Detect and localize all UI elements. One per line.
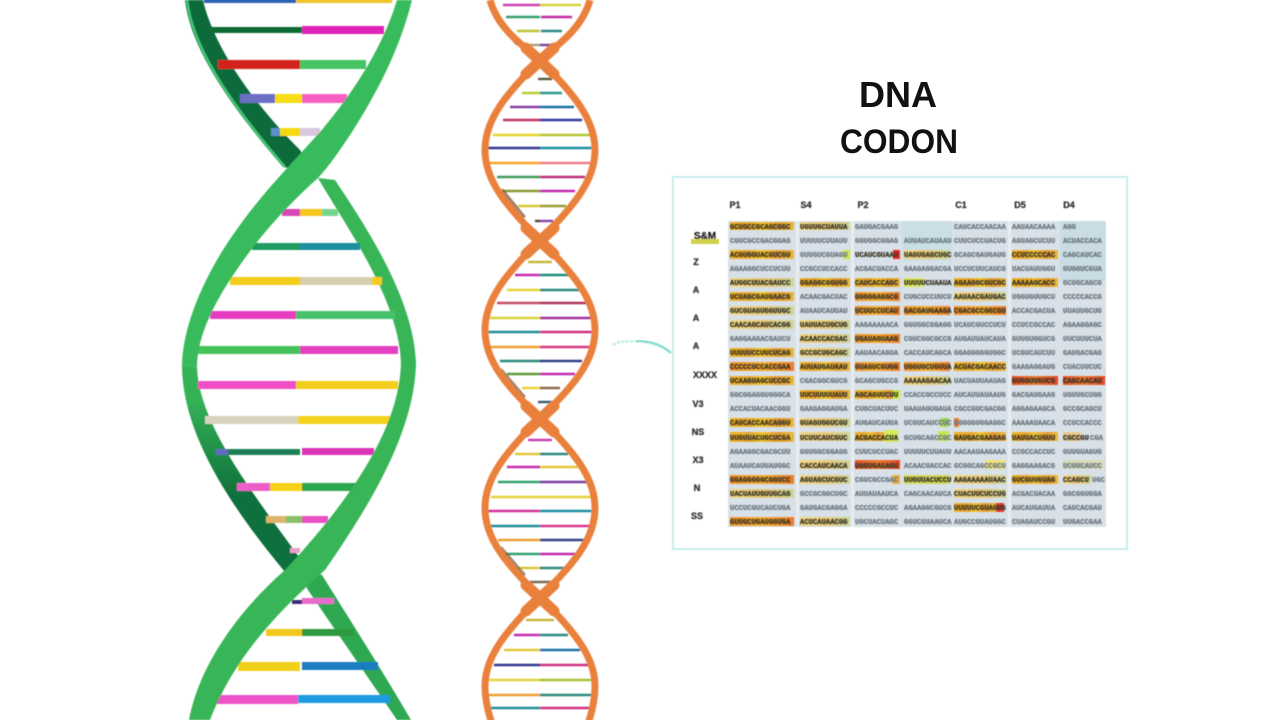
orange strands	[485, 0, 595, 720]
codon text: UUUUUCCUUCUCAG	[730, 350, 790, 358]
codon text: AUCAUUAUAAUG	[954, 392, 1006, 400]
codon text: UGGUGAUAGU	[855, 463, 898, 471]
codon text: GGGGGUGGAGGC	[954, 420, 1006, 428]
codon text: CAGCAACAU	[1063, 378, 1102, 386]
codon text: GUUGUCGUAGU	[800, 252, 847, 260]
codon text: CGUCGGCGCCG	[904, 336, 951, 344]
codon text: CGACGCCGGCGU	[954, 308, 1006, 316]
highlighted codon cells	[730, 222, 1105, 526]
codon text: CCGCCUCCACC	[800, 266, 848, 274]
codon text: UAUUACUGUU	[1012, 435, 1055, 443]
codon text: CUUCUCCUACUG	[954, 238, 1006, 246]
codon text: ACGUGGUACGUCGU	[730, 252, 790, 260]
codon text: AUAAUCAUUAUGGC	[730, 463, 791, 471]
column headers: D5	[1014, 200, 1026, 210]
rungs of the orange helix	[487, 5, 593, 708]
codon text: CACCAUCAACA	[800, 463, 848, 471]
codon text: AAUAACAGUA	[855, 350, 899, 358]
codon text: GUCGUUGUAG	[1012, 477, 1055, 485]
codon text: GCCGCGGCUGC	[800, 491, 848, 499]
column headers: P1	[729, 200, 741, 210]
codon text: UAUUACUGCUG	[800, 322, 847, 330]
title line one: DNA	[859, 74, 937, 115]
codon text: ACAACUACCAC	[904, 463, 952, 471]
codon text: GGAGGGGGUGGC	[954, 350, 1006, 358]
codon text: CGCCGU	[1063, 435, 1089, 443]
codon text: UUCUUUCUA	[1063, 336, 1103, 344]
column headers: D4	[1063, 200, 1075, 210]
row headers: A	[693, 341, 700, 351]
codon text: GUGGUUGUCG	[1012, 378, 1055, 386]
codon text: AGUAGCUCGUC	[800, 477, 848, 485]
codon text: UCGUCAUCCUC	[904, 420, 952, 428]
codon text: GGUGGCGGAG	[855, 238, 898, 246]
back strand lower	[182, 365, 312, 572]
codon text: AUGCCGUAUGGC	[954, 519, 1006, 527]
codon text: CGUCGCCGAC	[855, 477, 899, 485]
codon text: UGGUGCUGUUA	[904, 364, 952, 372]
codon text: CUUCUCCUAC	[855, 449, 899, 457]
codon text: ACGACUACAA	[1012, 491, 1056, 499]
codon text: CAGCAACAUCA	[904, 491, 952, 499]
codon text: CCUCCACCC	[1063, 420, 1103, 428]
codon text: AAAAAGCACC	[1012, 280, 1056, 288]
codon text: GAAGAGGAUGA	[800, 406, 848, 414]
codon text: ACCACUACAACGGU	[730, 406, 790, 414]
column headers: S4	[800, 200, 812, 210]
codon text: CCGCCACCUC	[1012, 449, 1056, 457]
codon text: UUGUUACUGCUCGA	[730, 435, 791, 443]
row headers: Z	[693, 257, 699, 267]
orange crossings	[526, 48, 554, 611]
codon text: GUGGUCGUA	[1063, 266, 1103, 274]
codon text: UUAUUGCUG	[1063, 308, 1102, 316]
orange DNA helix	[485, 0, 595, 720]
column headers: P2	[857, 200, 869, 210]
codon text: AGAAGGCGUCG	[904, 505, 951, 513]
codon text: UUUUUCUUAUU	[904, 449, 951, 457]
codon text: GUAGUCGUGG	[855, 364, 898, 372]
codon text: GGAGGGGGCGGUCC	[730, 477, 791, 485]
codon text: UUGACCGAA	[1063, 519, 1103, 527]
codon text: GCAGCUGCCG	[855, 378, 898, 386]
codon text: AAGAAAAACA	[855, 322, 899, 330]
codon text: AGAAGGCGACGCUU	[730, 449, 790, 457]
codon text: GGAGGCGGUGG	[800, 280, 847, 288]
codon text: AGAAGGCUCCUCUU	[730, 266, 790, 274]
panel frame	[673, 177, 1127, 549]
codon text: GAGGAAGACG	[1012, 463, 1055, 471]
codon text: CGUCGCCGACGGAG	[730, 238, 790, 246]
codon text: AGCAGUUCUU	[855, 392, 898, 400]
codon text: ACCACGACUA	[1012, 308, 1056, 316]
codon text: UUUUUCGUAGUG	[954, 505, 1006, 513]
codon text: CCCCCACCG	[1063, 294, 1102, 302]
codon text: GAUGACGAAGAG	[954, 435, 1006, 443]
codon text: ACGACUACCA	[855, 266, 899, 274]
codon text: UCAAGUAGCUCCGC	[730, 378, 791, 386]
codon text: GGUGGCGGAGG	[904, 322, 951, 330]
codon text: AUGAUUAUCAUA	[954, 336, 1006, 344]
codon text: CGACGGCGUCG	[800, 378, 847, 386]
row headers: N	[694, 483, 700, 493]
codon text: UGCUACUAGC	[855, 519, 899, 527]
front strand one	[182, 0, 412, 368]
orange strand shading	[498, 20, 524, 576]
codon text: ACGACCACUA	[855, 435, 899, 443]
codon text: CCCCCUCCACCGAA	[730, 364, 791, 372]
codon text: AUAAUCAUUAU	[800, 308, 847, 316]
codon text: AUUAUGAUAAU	[800, 364, 847, 372]
codon text: GUUGUAGUG	[1063, 449, 1102, 457]
codon text: CUACUUCUCCUG	[954, 491, 1006, 499]
codon text: UUCUUUUUAUU	[800, 392, 847, 400]
codon text: ACUACCACA	[1063, 238, 1103, 246]
codon text: UCUUCCUCAU	[855, 308, 898, 316]
codon text: AAAAAGAACAA	[904, 378, 952, 386]
codon text: AGUAGCUCUU	[1012, 238, 1055, 246]
codon text: CUACUUCUC	[1063, 364, 1103, 372]
column headers: C1	[955, 200, 967, 210]
codon text: UCAUCGUCCUCU	[954, 322, 1006, 330]
codon text: GAAGAGGAUG	[1012, 364, 1055, 372]
codon text: UACUAUUGUUGCAG	[730, 491, 790, 499]
codon text: CCAGCU	[1063, 477, 1089, 485]
title	[840, 74, 958, 161]
codon text: UUGUUACUCCU	[904, 477, 951, 485]
codon text: UGC	[1092, 477, 1106, 485]
row headers: NS	[692, 427, 704, 437]
codon text: UCCUCUUCAUCG	[954, 266, 1006, 274]
back strand upper highlight	[187, 0, 285, 167]
codon text	[730, 224, 1106, 527]
codon text: UUUUUCUAAUA	[904, 280, 952, 288]
table background	[728, 221, 1106, 527]
codon text: GCUGCAGCG	[1063, 280, 1102, 288]
codon text: GAUGACGAAG	[855, 224, 898, 232]
codon text: UUUUUCUUAUU	[800, 238, 847, 246]
codon text: GACGAUGAAG	[1012, 392, 1055, 400]
codon text: CCUCCCCCAC	[1012, 252, 1056, 260]
codon text: GCGGCAGCCGCU	[954, 463, 1006, 471]
codon text: ACAACGACUAC	[800, 294, 848, 302]
codon text: AUCAUGAUUA	[1012, 505, 1056, 513]
codon text: GGGGGAGGCG	[855, 294, 898, 302]
codon text: GUUGUGGUCG	[1012, 336, 1055, 344]
codon text: AGGAGAAGCA	[1012, 406, 1056, 414]
row headers: S&M	[694, 231, 716, 242]
codon text: AGG	[1063, 224, 1076, 232]
codon text: GCAGCGAUGAUG	[954, 252, 1006, 260]
codon text: GGUCGUAAUCA	[904, 519, 952, 527]
codon text: CCCCCGCCUC	[855, 505, 899, 513]
codon text: UACUAUUGGU	[1012, 266, 1055, 274]
codon text: GAGGAAGACGAUCU	[730, 336, 790, 344]
row headers: SS	[691, 511, 703, 521]
codon text: GUAGUGGUCGU	[800, 420, 847, 428]
codon text: UGAUAGUAAG	[855, 336, 898, 344]
codon text: ACUACGACAACC	[954, 364, 1006, 372]
codon text: GAAGAGGACGA	[904, 266, 952, 274]
codon text: CAUCACCAGC	[855, 280, 899, 288]
codon text: GACGAUGAAGA	[904, 308, 952, 316]
codon text: GAUGACGAG	[1063, 350, 1102, 358]
codon text: GGUGGCGGAGG	[800, 449, 847, 457]
title line two: CODON	[840, 123, 958, 161]
codon text: CCUCCGCCAC	[1012, 322, 1056, 330]
codon text: GUUGCUGAUGGUGA	[730, 519, 791, 527]
codon text: GUCGUAGUGGUUGC	[730, 308, 791, 316]
codon text: CUGCUACUUC	[855, 406, 899, 414]
row headers: X3	[692, 455, 704, 465]
codon text: CAGCAUCAC	[1063, 252, 1103, 260]
codon text: ACAACCACGAC	[800, 336, 848, 344]
codon text: CAUCACCAACAGGU	[730, 420, 790, 428]
back strand upper dark	[185, 0, 312, 172]
front strand two	[189, 360, 416, 720]
row headers: V3	[692, 399, 704, 409]
codon text: AUUAUAAUCA	[855, 491, 899, 499]
codon text: CAACAGCAUCACGG	[730, 322, 790, 330]
codon text: CUGCUCCUUCU	[904, 294, 951, 302]
codon text: UGUUGCUGG	[1063, 392, 1102, 400]
codon text: AGAAGGAGC	[1063, 322, 1103, 330]
codon text: CAUCACCAACAA	[954, 224, 1006, 232]
codon text: GCUGCCGCAGCGGC	[730, 224, 791, 232]
codon text: AACAAUAAGAAA	[954, 449, 1006, 457]
codon text: UCUAGCGAUGAACG	[730, 294, 790, 302]
codon text: ACUCAUAACGG	[800, 519, 847, 527]
codon text: AUGGCUUACGAUCC	[730, 280, 791, 288]
codon text: AAGAAAAAUAAC	[954, 477, 1006, 485]
back strand right lower tail	[296, 566, 411, 720]
codon text: AAUAACAAAA	[1012, 224, 1056, 232]
codon text: GAUGACGAGGA	[800, 505, 848, 513]
codon text: UAAUAGUGAUA	[904, 406, 952, 414]
codon text: CGCCGUCGACGG	[954, 406, 1006, 414]
codon text: CCACCGCCUCC	[904, 392, 952, 400]
row headers: XXXX	[693, 370, 717, 380]
column headers	[729, 200, 1075, 210]
codon text: CUAGAUCCGU	[1012, 519, 1055, 527]
row headers: A	[693, 313, 700, 323]
row headers	[691, 231, 719, 521]
codon text: GCCGCUGCAGC	[800, 350, 848, 358]
codon text: AUUAUCAUAAU	[904, 238, 951, 246]
codon text: CAUCACGAU	[1063, 505, 1102, 513]
codon text: AGAAGGCGUCGC	[954, 280, 1006, 288]
codon text: AAAAAUAACA	[1012, 420, 1056, 428]
panel: codon table	[673, 177, 1127, 549]
back section of right strand	[318, 178, 416, 365]
row headers: A	[693, 285, 700, 295]
codon text: UACUAUUAAUAG	[954, 378, 1006, 386]
codon text: GCUGCAGCCGC	[904, 435, 952, 443]
codon text: UCGUCAUCUU	[1012, 350, 1055, 358]
codon text: UGGUGUUGCU	[1012, 294, 1055, 302]
codon text: GGCGGUGGA	[1063, 491, 1103, 499]
codon text: UGUUGCUAUUA	[800, 224, 848, 232]
codon text: UCUUCAUCGUC	[800, 435, 848, 443]
codon text: CACCAUCAGCA	[904, 350, 952, 358]
green DNA helix	[182, 0, 416, 720]
connector from helix to table	[613, 341, 671, 353]
codon text: AUGAUCAUUA	[855, 420, 899, 428]
rungs of the green helix	[198, 0, 398, 704]
codon text: CGA	[1090, 435, 1104, 443]
codon text: AAUAACGAUGAC	[954, 294, 1006, 302]
codon text: GGCGGAGGUGGGCA	[730, 392, 791, 400]
codon text: UCAUCGUAAU	[855, 252, 898, 260]
codon text: UAGUGAGCUGC	[904, 252, 952, 260]
codon text: UCCUCGUCAUCUGA	[730, 505, 791, 513]
codon text: GCCGCAGCU	[1063, 406, 1102, 414]
codon text: UCGUCAUCC	[1063, 463, 1103, 471]
